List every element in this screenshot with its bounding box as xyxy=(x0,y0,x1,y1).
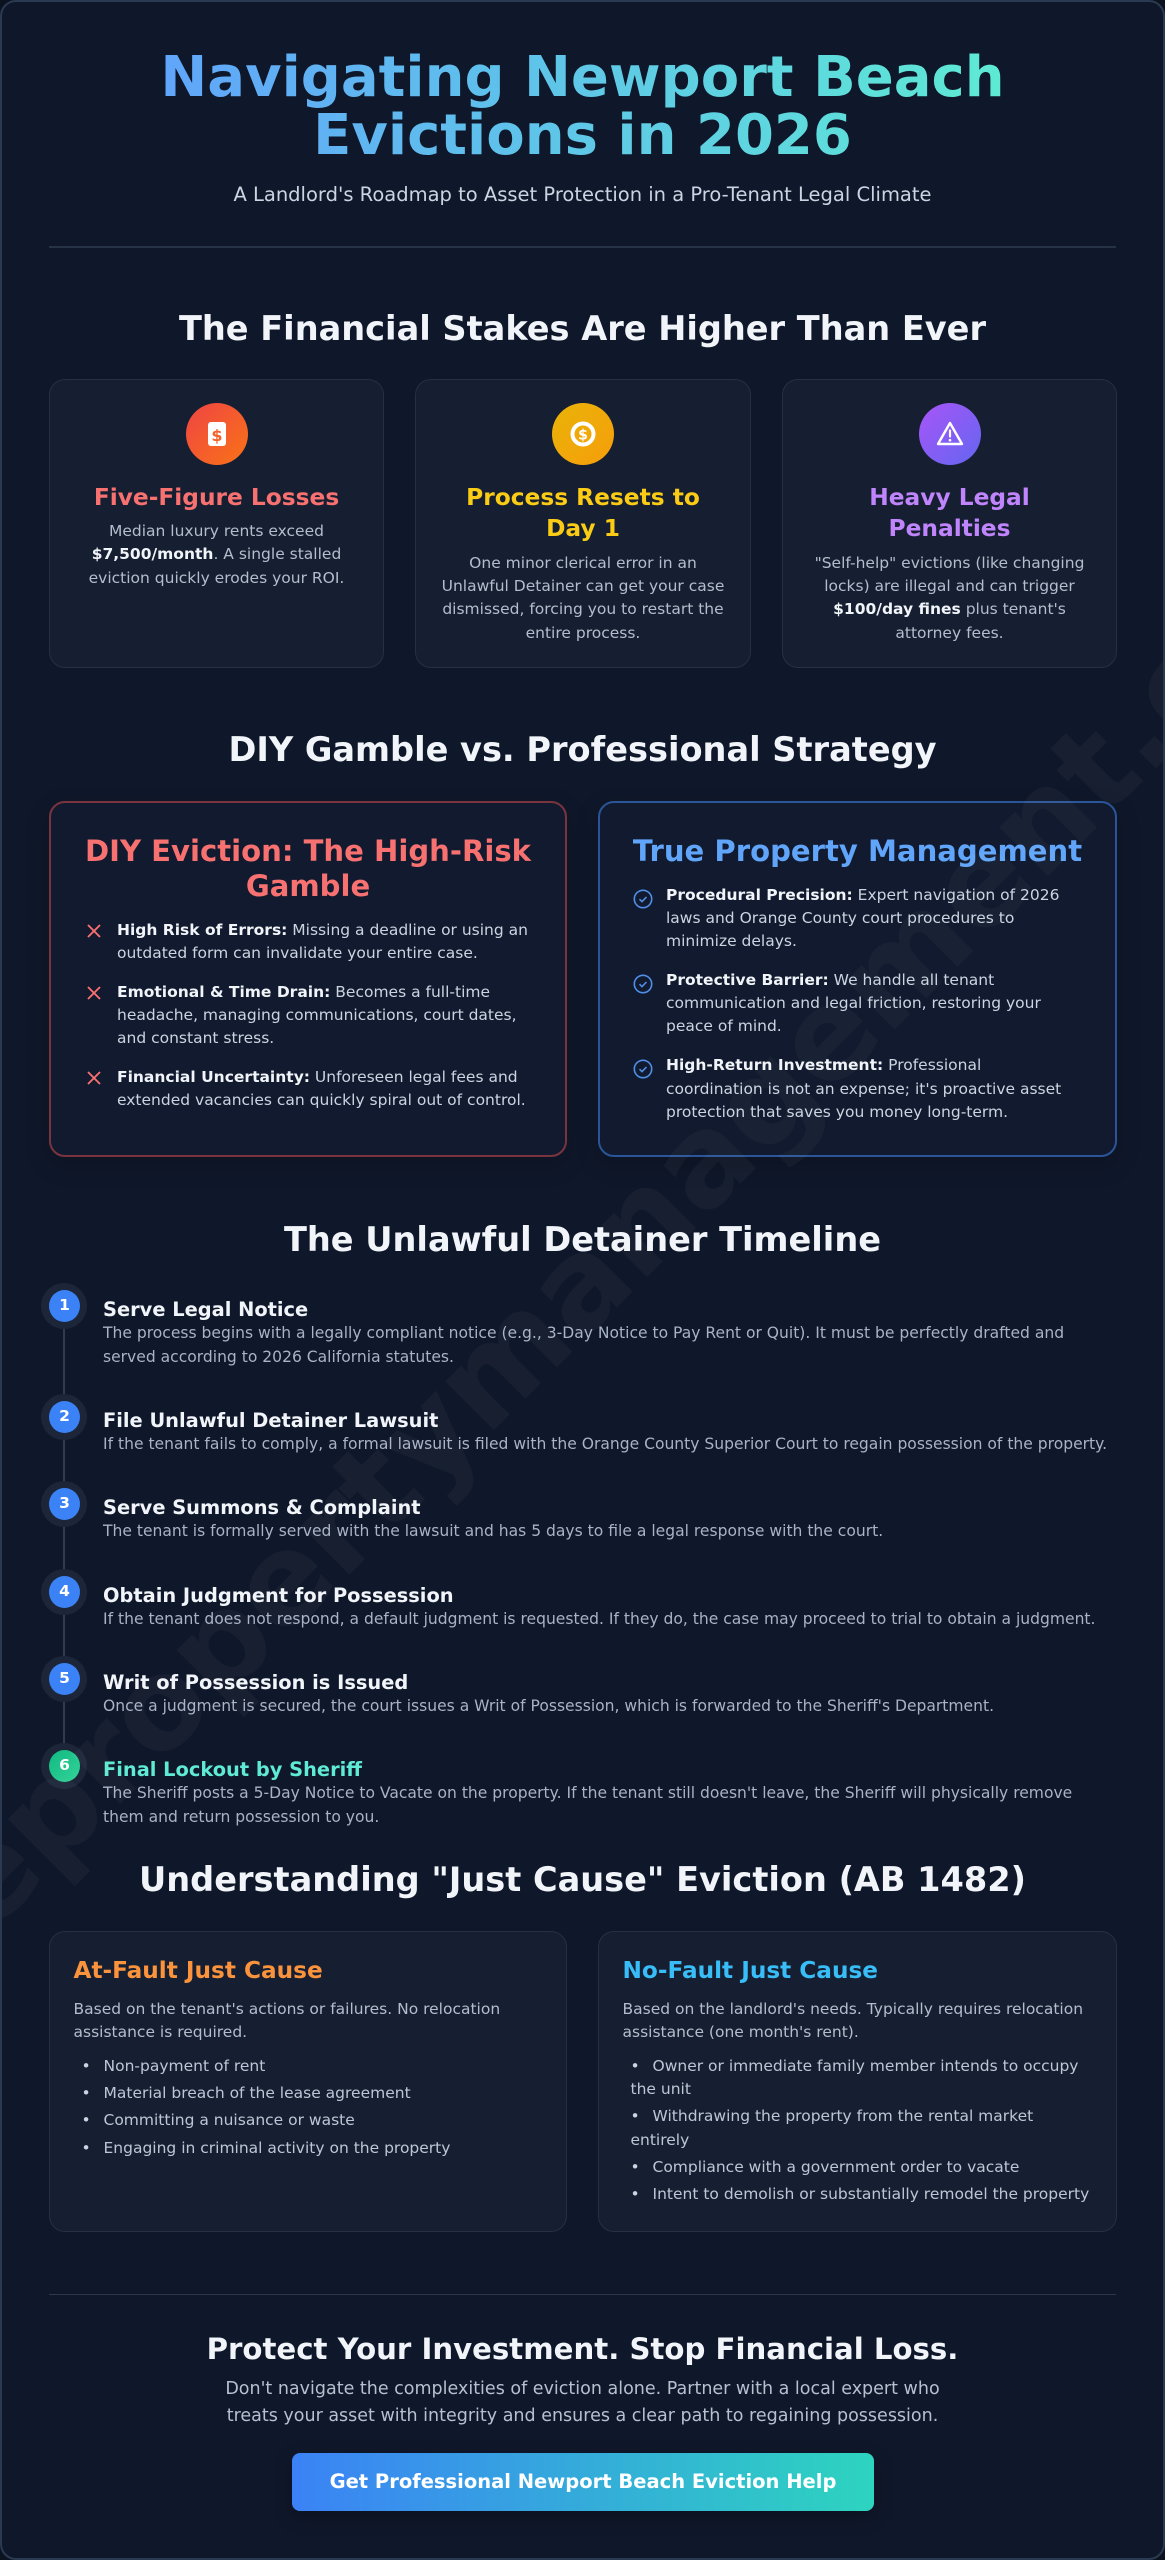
title: Navigating Newport Beach xyxy=(160,45,1005,110)
panel: at-fault just cause xyxy=(49,1931,567,2232)
card text: dismissed, forcing you to restart the xyxy=(442,600,724,618)
no-fault list: Withdrawing the property from the rental market xyxy=(652,2107,1033,2125)
step text: The Sheriff posts a 5-Day Notice to Vacate on the property. If the tenant still doesn't leave, the Sheriff will physically remove xyxy=(103,1784,1072,1802)
card heading: Day 1 xyxy=(546,515,620,542)
call to action xyxy=(207,2332,958,2511)
card text: locks) are illegal and can trigger xyxy=(824,577,1075,595)
card text: $100/day fines plus tenant's xyxy=(833,600,1066,618)
risk list: High Risk of Errors: Missing a deadline or using an xyxy=(117,920,528,938)
card heading: Five-Figure Losses xyxy=(94,484,339,511)
panel heading: At-Fault Just Cause xyxy=(74,1957,323,1984)
panel heading: No-Fault Just Cause xyxy=(622,1957,878,1984)
step title: Serve Summons & Complaint xyxy=(103,1496,421,1519)
benefit list: coordination is not an expense; it's proactive asset xyxy=(666,1080,1061,1098)
benefit list: minimize delays. xyxy=(666,932,797,950)
CTA text: Don't navigate the complexities of eviction alone. Partner with a local expert who xyxy=(225,2378,940,2398)
at-fault list: Committing a nuisance or waste xyxy=(104,2111,355,2129)
step number xyxy=(41,1743,87,1789)
benefit list: Procedural Precision: Expert navigation of 2026 xyxy=(666,886,1059,904)
panel: DIY eviction xyxy=(49,801,567,1157)
panel: process resets xyxy=(415,379,751,668)
risk list: extended vacancies can quickly spiral out of control. xyxy=(117,1091,526,1109)
heading: timeline: The Unlawful Detainer Timeline xyxy=(284,1220,881,1259)
heading: DIY vs professional: DIY Gamble vs. Professional Strategy xyxy=(228,730,937,769)
step 1 xyxy=(41,1283,1064,1366)
step text: If the tenant does not respond, a default judgment is requested. If they do, the case may proceed to trial to obtain a judgment. xyxy=(103,1610,1095,1628)
step text: The process begins with a legally compliant notice (e.g., 3-Day Notice to Pay Rent or Quit). It must be perfectly drafted and xyxy=(103,1324,1064,1342)
step title: File Unlawful Detainer Lawsuit xyxy=(103,1409,438,1432)
benefit list: laws and Orange County court procedures to xyxy=(666,909,1014,927)
card heading: Heavy Legal xyxy=(869,484,1030,511)
panel text: assistance is required. xyxy=(74,2023,247,2041)
step number xyxy=(41,1394,87,1440)
panel: no-fault just cause xyxy=(598,1931,1117,2232)
icon: coin: $ xyxy=(578,428,588,444)
step 5 xyxy=(41,1656,994,1715)
card text: entire process. xyxy=(526,624,640,642)
title xyxy=(160,45,1005,168)
step number: 1 xyxy=(59,1296,70,1314)
card heading: Penalties xyxy=(889,515,1010,542)
step number: 3 xyxy=(59,1494,70,1512)
step text: If the tenant fails to comply, a formal lawsuit is filed with the Orange County Superior Court to regain possession of the property. xyxy=(103,1435,1107,1453)
panel text xyxy=(74,2000,500,2041)
at-fault list xyxy=(84,2057,450,2157)
risk list: headache, managing communications, court dates, xyxy=(117,1006,517,1024)
card text xyxy=(442,554,724,642)
CTA button xyxy=(292,2453,874,2511)
card heading xyxy=(466,484,700,542)
step number xyxy=(41,1283,87,1329)
timeline xyxy=(41,1283,1107,1826)
panel: heavy legal penalties xyxy=(782,379,1117,668)
step text: Once a judgment is secured, the court issues a Writ of Possession, which is forwarded to the Sheriff's Department. xyxy=(103,1697,994,1715)
step title: Serve Legal Notice xyxy=(103,1298,308,1321)
subtitle: A Landlord's Roadmap to Asset Protection in a Pro-Tenant Legal Climate xyxy=(233,182,932,206)
step number: 5 xyxy=(59,1669,70,1687)
step text: The tenant is formally served with the lawsuit and has 5 days to file a legal response with the court. xyxy=(103,1522,883,1540)
card text: eviction quickly erodes your ROI. xyxy=(89,569,344,587)
benefit list: peace of mind. xyxy=(666,1017,782,1035)
icon: warning xyxy=(918,403,980,465)
benefit list xyxy=(634,886,1061,1121)
title: Evictions in 2026 xyxy=(313,103,852,168)
no-fault list: Intent to demolish or substantially remodel the property xyxy=(652,2185,1089,2203)
step number xyxy=(41,1656,87,1702)
at-fault list: Non-payment of rent xyxy=(104,2057,265,2075)
heading: financial stakes: The Financial Stakes Are Higher Than Ever xyxy=(179,309,986,348)
benefit list: Protective Barrier: We handle all tenant xyxy=(666,971,994,989)
step number: 6 xyxy=(59,1756,70,1774)
risk list xyxy=(87,920,528,1109)
card text: One minor clerical error in an xyxy=(469,554,697,572)
card text: $7,500/month. A single stalled xyxy=(92,545,341,563)
no-fault list xyxy=(630,2057,1089,2203)
CTA text: treats your asset with integrity and ensures a clear path to regaining possession. xyxy=(227,2406,938,2426)
at-fault list: Engaging in criminal activity on the property xyxy=(104,2139,450,2157)
CTA button: Get Professional Newport Beach Eviction Help xyxy=(330,2470,836,2493)
step number: 4 xyxy=(59,1582,70,1600)
icon: money card xyxy=(186,403,248,465)
timeline connector xyxy=(63,1303,65,1763)
benefit list: protection that saves you money long-term. xyxy=(666,1103,1008,1121)
panel heading: Gamble xyxy=(246,869,370,903)
panel text xyxy=(622,2000,1083,2041)
card text xyxy=(815,554,1084,642)
step number xyxy=(41,1569,87,1615)
icon: coin xyxy=(552,403,614,465)
step text xyxy=(102,1324,1064,1366)
risk list: outdated form can invalidate your entire case. xyxy=(117,944,478,962)
step title: Obtain Judgment for Possession xyxy=(103,1584,454,1607)
card text: Median luxury rents exceed xyxy=(109,522,324,540)
step 6 xyxy=(41,1743,1072,1826)
at-fault list: Material breach of the lease agreement xyxy=(104,2084,411,2102)
CTA heading: Protect Your Investment. Stop Financial Loss. xyxy=(207,2332,958,2366)
card heading: Process Resets to xyxy=(466,484,700,511)
panel text: Based on the landlord's needs. Typically requires relocation xyxy=(622,2000,1083,2018)
card text: "Self-help" evictions (like changing xyxy=(815,554,1084,572)
panel heading xyxy=(85,834,532,903)
benefit list: communication and legal friction, restoring your xyxy=(666,994,1041,1012)
panel text: Based on the tenant's actions or failures. No relocation xyxy=(74,2000,500,2018)
no-fault list: Owner or immediate family member intends to occupy xyxy=(652,2057,1078,2075)
step title: Writ of Possession is Issued xyxy=(103,1671,408,1694)
card heading xyxy=(869,484,1030,542)
panel text: assistance (one month's rent). xyxy=(622,2023,859,2041)
step 4 xyxy=(41,1569,1095,1628)
step number xyxy=(41,1481,87,1527)
panel heading: True Property Management xyxy=(633,834,1082,868)
no-fault list: the unit xyxy=(630,2080,691,2098)
step text xyxy=(102,1784,1072,1826)
card text xyxy=(89,522,344,587)
step 2 xyxy=(41,1394,1107,1453)
no-fault list: entirely xyxy=(630,2131,689,2149)
risk list: Financial Uncertainty: Unforeseen legal fees and xyxy=(117,1068,518,1086)
CTA text xyxy=(225,2378,940,2426)
heading: just cause: Understanding "Just Cause" Eviction (AB 1482) xyxy=(139,1860,1026,1899)
step text: served according to 2026 California statutes. xyxy=(103,1348,454,1366)
benefit list: High-Return Investment: Professional xyxy=(666,1056,981,1074)
panel: true property management xyxy=(598,801,1117,1157)
panel heading: DIY Eviction: The High-Risk xyxy=(85,834,531,868)
card text: attorney fees. xyxy=(895,624,1004,642)
step text: them and return possession to you. xyxy=(103,1808,379,1826)
step 3 xyxy=(41,1481,883,1540)
card text: Unlawful Detainer can get your case xyxy=(442,577,724,595)
risk list: and constant stress. xyxy=(117,1029,274,1047)
icon: money card: $ xyxy=(211,426,222,445)
step number: 2 xyxy=(59,1407,70,1425)
no-fault list: Compliance with a government order to vacate xyxy=(652,2158,1019,2176)
panel: five-figure losses xyxy=(49,379,384,668)
step title: Final Lockout by Sheriff xyxy=(103,1758,362,1781)
risk list: Emotional & Time Drain: Becomes a full-time xyxy=(117,983,490,1001)
